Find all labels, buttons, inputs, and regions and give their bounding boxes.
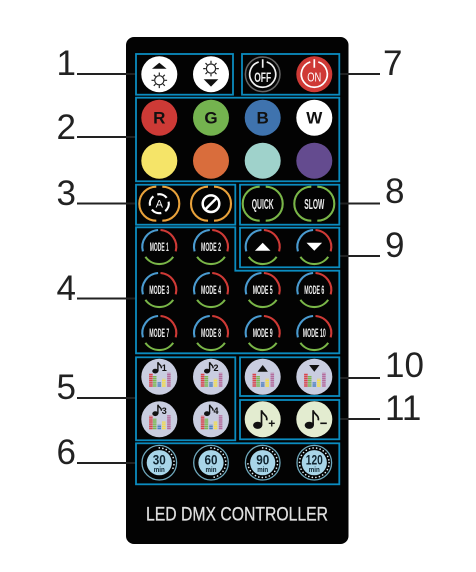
callout 11: 11 (385, 389, 421, 428)
panel 5: music modes (136, 357, 235, 440)
button: purple (296, 143, 332, 179)
button: 90 min: min (257, 465, 269, 474)
button: 30 min: min (154, 465, 165, 474)
button: off: OFF (254, 70, 271, 85)
button: mode 10 (297, 316, 331, 350)
button: 60 min: min (206, 465, 217, 474)
button: mode 4 (194, 273, 228, 307)
button: auto: A (156, 199, 164, 211)
button: sensitivity plus: + (268, 416, 275, 430)
button: red: R (153, 109, 165, 128)
button: 120 min: 120 (306, 452, 323, 468)
panel 7: power (242, 54, 339, 95)
button: 90 min: 90 (256, 452, 269, 468)
button: up (246, 230, 280, 264)
panel 11: sensitivity (240, 400, 339, 439)
button: mode 5: MODE 5 (253, 285, 273, 297)
panel 1: brightness (136, 54, 233, 95)
callout 3 (57, 174, 136, 213)
button: mode 9: MODE 9 (253, 328, 273, 340)
button: mode 2: MODE 2 (201, 242, 221, 254)
button: white (296, 100, 332, 136)
button: mode 10: MODE 10 (303, 328, 326, 340)
button: mode 1: MODE 1 (150, 242, 169, 254)
button: 60 min (194, 445, 228, 480)
panel 4: modes (136, 227, 339, 353)
button: mode 6 (297, 273, 331, 307)
button: mode 7 (142, 316, 176, 350)
callout 10 (339, 346, 424, 385)
callout 7 (339, 44, 402, 83)
button: music down (296, 359, 332, 395)
button: slow: SLOW (304, 197, 324, 213)
button: red (141, 100, 177, 136)
button: mode 6: MODE 6 (304, 285, 324, 297)
button: stop (191, 187, 231, 221)
button: mode 5 (246, 273, 280, 307)
callout 6: 6 (57, 433, 76, 472)
button: mode 8: MODE 8 (201, 328, 221, 340)
button: 120 min (297, 445, 332, 480)
button: quick: QUICK (252, 197, 274, 213)
callout 10: 10 (385, 346, 424, 385)
product name: LED DMX CONTROLLER (146, 504, 328, 526)
button: music 2: 2 (214, 363, 219, 373)
button: aqua (245, 143, 281, 179)
button: orange (193, 143, 229, 179)
callout 8: 8 (385, 172, 404, 211)
panel 10: music speed (240, 357, 339, 396)
callout 5: 5 (57, 368, 76, 407)
panel 8: speed (240, 185, 339, 225)
button: 30 min: 30 (153, 452, 166, 468)
panel 3: auto and stop (136, 185, 235, 225)
callout 9 (339, 226, 404, 265)
callout 1 (57, 44, 136, 83)
button: mode 1 (142, 230, 176, 264)
callout labels (57, 44, 424, 472)
button: music 3: 3 (162, 406, 167, 416)
button: 120 min: min (309, 465, 320, 474)
callout 11 (339, 389, 421, 428)
callout 4 (57, 269, 136, 308)
button: blue (245, 100, 281, 136)
button: blue: B (257, 109, 269, 128)
callout 1: 1 (57, 44, 76, 83)
remote control body (126, 37, 348, 544)
button: 60 min: 60 (204, 452, 218, 468)
callout 6 (57, 433, 136, 472)
button: music up (245, 359, 281, 395)
button: mode 3 (142, 273, 176, 307)
icon: brightness down (193, 56, 229, 92)
button: yellow (141, 143, 177, 179)
button: mode 2 (194, 230, 228, 264)
button: 90 min (245, 445, 280, 480)
callout 5 (57, 368, 136, 407)
callout 7: 7 (383, 44, 402, 83)
callout 8 (339, 172, 404, 211)
panel 2: colors (136, 98, 339, 181)
button: mode 4: MODE 4 (201, 285, 221, 297)
button: white: W (306, 109, 323, 128)
button: music 1: 1 (162, 363, 167, 373)
button: green (193, 100, 229, 136)
button: green: G (204, 109, 218, 128)
callout 9: 9 (385, 226, 404, 265)
panel 6: timers (136, 443, 339, 484)
panel 9: mode up and down (240, 228, 339, 267)
callout 2 (57, 108, 136, 147)
button: mode 9 (246, 316, 280, 350)
button: music 4: 4 (214, 406, 219, 416)
button: mode 7: MODE 7 (149, 328, 169, 340)
button: sensitivity minus (296, 401, 332, 437)
callout 4: 4 (57, 269, 76, 308)
button: mode 8 (194, 316, 228, 350)
callout 3: 3 (57, 174, 76, 213)
icon: brightness up (141, 56, 177, 92)
callout 2: 2 (57, 108, 76, 147)
button: mode 3: MODE 3 (149, 285, 169, 297)
button: on: ON (307, 71, 321, 85)
button: 30 min (142, 445, 177, 480)
button: down (297, 230, 331, 264)
